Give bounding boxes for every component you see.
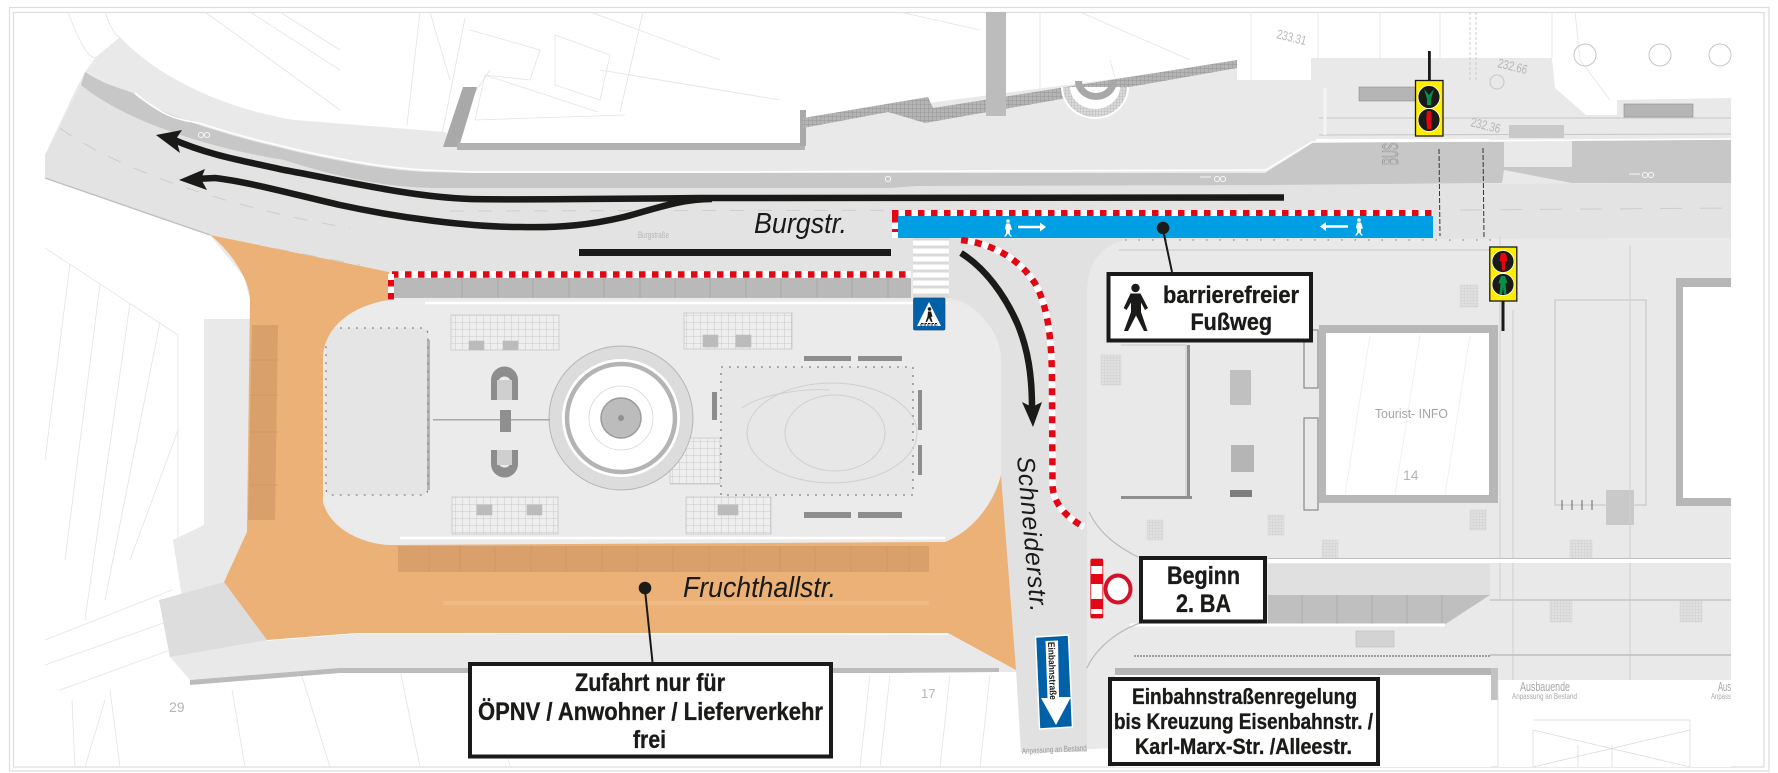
map labels: elevations and small notes: Anpassung an Bestand — [1022, 743, 1087, 756]
south building wall and number — [169, 668, 999, 715]
road surface: Burgstr. — [45, 85, 1731, 272]
south sidewalk white curb — [267, 633, 948, 640]
cycle lane band — [81, 72, 1731, 188]
plaza: U-shaped benches — [491, 366, 518, 477]
map labels: elevations and small notes: Burgstraße — [638, 230, 669, 240]
Tourist-Info building: Tourist- INFO — [1375, 406, 1448, 421]
street label: Schneiderstr.: Schneiderstr. — [1011, 455, 1053, 613]
icon: no-entry traffic sign — [1106, 576, 1130, 602]
central plaza — [323, 298, 1001, 545]
icon: pedestrian — [1124, 284, 1148, 331]
raised boxes north-east — [1359, 87, 1693, 117]
road surface: Schneiderstr. — [948, 238, 1126, 752]
black bar: closed lane south of Burgstr. — [579, 249, 891, 256]
building south-east with dark wall: Anpass — [1711, 692, 1731, 701]
callout leader: footpath — [1157, 222, 1172, 272]
callout leader: Fruchthallstr. — [639, 582, 652, 662]
callout: barrierefreier Fußweg — [1108, 274, 1311, 340]
plaza: central bar and axis — [427, 340, 550, 490]
plaza: fountain circle — [549, 346, 693, 490]
icon: one-way street sign — [1036, 635, 1072, 729]
north building walls — [443, 12, 1237, 150]
plaza: panel right — [721, 367, 913, 495]
paving strip joints — [462, 278, 888, 298]
Tourist-Info building: 14 — [1403, 467, 1419, 483]
red and white barrier along footpath — [892, 213, 1433, 238]
traffic light north — [1416, 51, 1443, 136]
Tourist-Info building — [1319, 325, 1498, 503]
callout: Zufahrt nur für: Zufahrt nur für — [575, 669, 725, 697]
white plaza edge line — [400, 303, 948, 538]
gray paving strip south of Burgstr. — [392, 278, 911, 298]
icon: pedestrian crossing sign — [914, 298, 945, 330]
semi-circular planter — [1061, 81, 1129, 119]
narrow buildings between Schneiderstr. and Tourist-Info — [1119, 236, 1646, 700]
gray patch at western junction — [159, 582, 267, 657]
footpath: pedestrian and arrow west — [1320, 218, 1363, 236]
orange zone: center line — [443, 601, 929, 605]
orange zone: Fruchthallstr. access area — [210, 235, 1016, 670]
dashed stop lines — [1439, 148, 1484, 238]
building far right — [1676, 278, 1731, 506]
crosswalk — [913, 238, 949, 298]
callout: Beginn 2. BA: Beginn — [1167, 562, 1240, 590]
orange zone: darker strip south — [398, 546, 929, 572]
arrow: traffic direction Burgstr. lower — [179, 169, 712, 227]
plaza: hatched grid fields — [451, 313, 792, 534]
callout: Einbahnstraßenregelung: Karl-Marx-Str. /Alleestr. — [1135, 734, 1352, 759]
arrow: traffic direction Schneiderstr. — [961, 253, 1042, 427]
orange zone: darker strip west — [248, 325, 278, 520]
red and white barrier along Burgstr. south — [391, 274, 911, 300]
map labels: elevations and small notes — [638, 26, 1529, 756]
plaza: benches row — [712, 356, 922, 518]
building south-east with dark wall: Anpassung an Bestand — [1512, 692, 1577, 701]
map labels: elevations and small notes: 232.36 — [1469, 114, 1502, 136]
orange zone: strip joints — [250, 360, 909, 572]
map labels: elevations and small notes: 232.66 — [1496, 55, 1529, 77]
pavement grid fields east — [1101, 285, 1702, 622]
building south-east with dark wall: Aus — [1718, 679, 1731, 694]
callout: Einbahnstraßenregelung: Einbahnstraßenregelung — [1132, 684, 1357, 709]
map labels: elevations and small notes: 233.31 — [1275, 26, 1308, 48]
east road strip and lay-by — [1087, 512, 1731, 668]
blue accessible footpath — [898, 216, 1433, 238]
building south-east with dark wall: Ausbauende — [1520, 679, 1570, 694]
footpath: pedestrian and arrow east — [1004, 219, 1046, 236]
callout: Zufahrt nur für: frei — [633, 726, 666, 754]
white kerb line along north side — [135, 93, 1731, 172]
cycle lane symbols — [198, 132, 1654, 182]
white curb line south of road — [45, 178, 210, 235]
building south-east with dark wall — [1115, 668, 1731, 767]
pavement details north-east — [1316, 12, 1731, 140]
south building wall and number: 29 — [169, 699, 185, 715]
traffic light east — [1490, 247, 1517, 331]
plaza: oval outline — [742, 383, 917, 483]
callout: Beginn 2. BA: 2. BA — [1176, 590, 1231, 618]
street label: Burgstr.: Burgstr. — [754, 208, 847, 240]
callout: Beginn 2. BA — [1141, 558, 1265, 622]
infographic: traffic routing map: BUS — [1378, 143, 1403, 165]
callout: barrierefreier Fußweg: Fußweg — [1190, 309, 1272, 336]
callout: Einbahnstraßenregelung — [1110, 679, 1378, 764]
street label: Fruchthallstr.: Fruchthallstr. — [683, 572, 836, 604]
icon: one-way street sign: Einbahnstraße — [1045, 642, 1058, 700]
plaza: panel left — [326, 328, 428, 495]
callout: Zufahrt nur für: ÖPNV / Anwohner / Lieferverkehr — [478, 697, 823, 726]
red and white barrier curve along Schneiderstr. — [961, 240, 1084, 527]
dashed lane markings — [60, 128, 1731, 265]
icon: road barrier — [1091, 559, 1103, 618]
south building wall and number: 17 — [921, 686, 935, 701]
callout: Einbahnstraßenregelung: bis Kreuzung Eisenbahnstr. / — [1114, 709, 1373, 734]
callout: barrierefreier Fußweg: barrierefreier — [1163, 282, 1299, 309]
callout: Zufahrt nur für — [470, 664, 831, 756]
arrow: traffic direction Burgstr. upper — [156, 130, 1284, 199]
